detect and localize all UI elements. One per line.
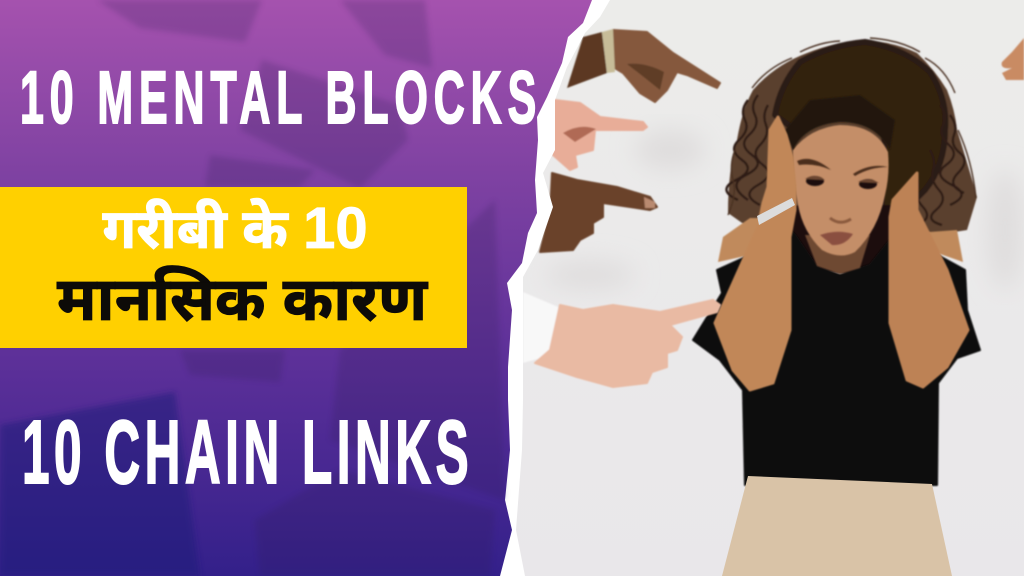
hand: far right fingers bbox=[1002, 38, 1024, 80]
trousers bbox=[722, 476, 952, 576]
wall shadows bbox=[545, 130, 1023, 290]
yellow banner bbox=[0, 187, 467, 348]
eyes, nose and mouth bbox=[797, 159, 888, 245]
bracelet bbox=[757, 198, 795, 225]
banner line two: मानसिक कारण bbox=[57, 265, 428, 333]
hair bbox=[726, 38, 977, 275]
face bbox=[793, 125, 889, 256]
hand: second pointing bbox=[553, 100, 647, 170]
right arm bbox=[890, 173, 968, 387]
banner line one: गरीबी के 10 bbox=[102, 196, 368, 261]
black top bbox=[693, 225, 980, 485]
hand: third pointing bbox=[540, 173, 657, 252]
hand: bottom pointing with white cuff bbox=[523, 292, 720, 387]
neck bbox=[805, 235, 870, 274]
left purple panel with torn white edge bbox=[0, 0, 610, 576]
heading: 10 chain links: 10 CHAIN LINKS bbox=[22, 402, 469, 503]
heading: 10 mental blocks: 10 MENTAL BLOCKS bbox=[20, 56, 536, 139]
hair fringe bbox=[785, 95, 895, 150]
neck hair shadow bbox=[785, 205, 905, 275]
skin: shoulders bbox=[718, 218, 963, 262]
left arm bbox=[715, 117, 795, 390]
woman bbox=[693, 38, 980, 576]
hand: top pointing with bracelet bbox=[567, 29, 720, 102]
photo background wall bbox=[500, 0, 1024, 576]
faded background objects bbox=[97, 0, 505, 576]
